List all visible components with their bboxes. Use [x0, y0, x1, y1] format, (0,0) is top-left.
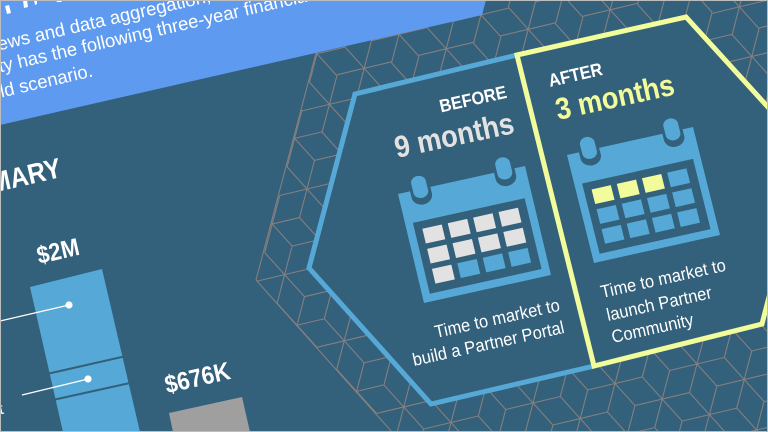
leader line 2	[22, 375, 92, 395]
bar: before	[30, 269, 140, 432]
icon: calendar before	[394, 151, 551, 303]
bar dividers	[49, 356, 130, 400]
bar chart	[0, 233, 250, 432]
after duration: 3 months	[552, 68, 678, 127]
after label: AFTER	[546, 58, 605, 91]
after caption: Community	[609, 309, 696, 347]
leader line 1	[0, 301, 73, 321]
banner	[0, 0, 486, 125]
panel: after	[517, 17, 768, 366]
title fragment	[5, 0, 63, 14]
after caption: Time to market to	[598, 254, 728, 302]
before label: BEFORE	[437, 81, 509, 117]
panel: before	[309, 55, 594, 404]
before caption: build a Partner Portal	[410, 317, 566, 370]
value label: $676K: $676K	[162, 357, 234, 400]
before duration: 9 months	[392, 107, 517, 165]
before caption: Time to market to	[432, 294, 562, 342]
after caption	[598, 254, 728, 347]
bar: after	[169, 397, 250, 432]
after caption: launch Partner	[604, 282, 714, 325]
value label: $2M: $2M	[34, 233, 82, 269]
icon: calendar after	[563, 112, 720, 263]
banner text: ld scenario.	[0, 60, 95, 101]
